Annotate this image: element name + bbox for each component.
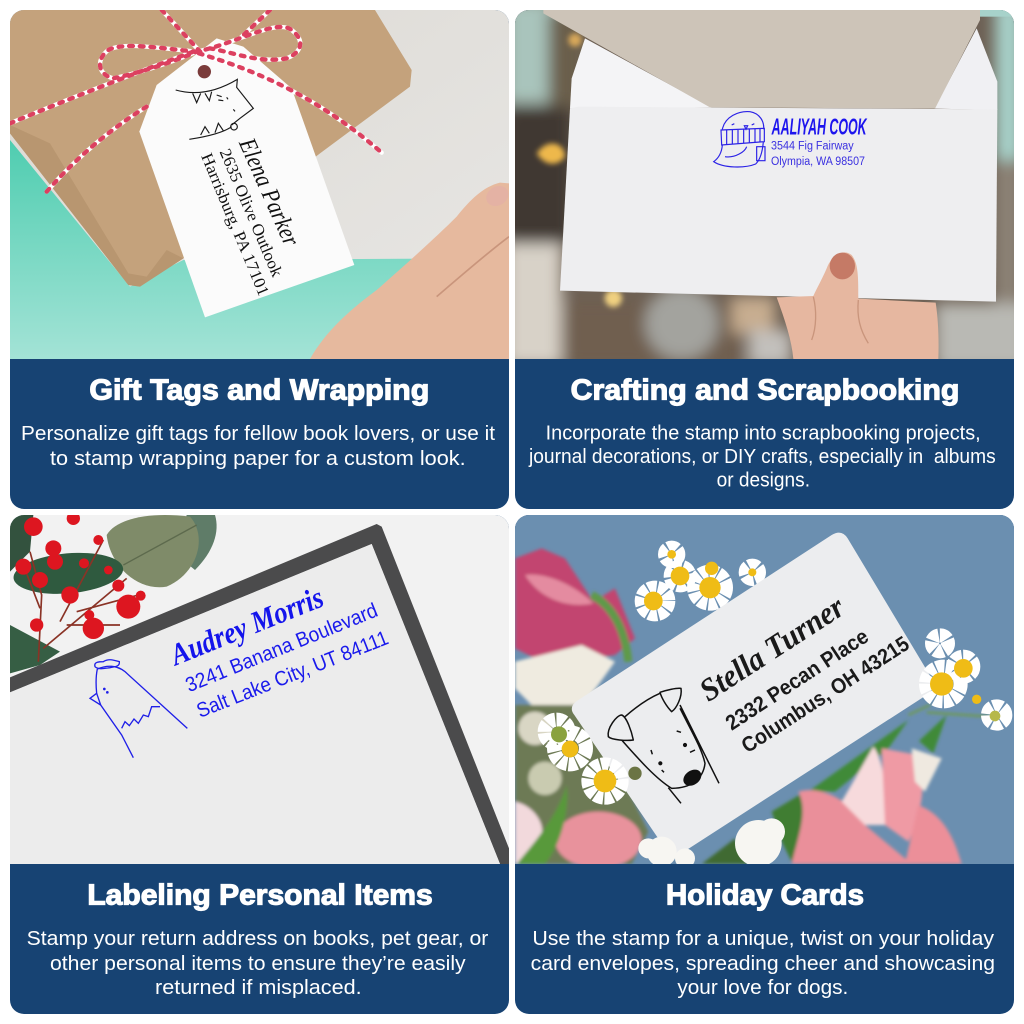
body text xyxy=(27,928,489,999)
body text: Personalize gift tags for fellow book lovers, or use it xyxy=(21,423,495,445)
panel: crafting and scrapbooking xyxy=(515,10,1014,509)
photo: stamped book page: Salt Lake City, UT 84111 xyxy=(193,626,392,723)
photo: envelope with stamped address xyxy=(515,10,1014,359)
body text xyxy=(528,422,996,492)
body text xyxy=(21,423,495,470)
photo: envelope with stamped address: Olympia, WA 98507 xyxy=(771,154,865,168)
body text: Incorporate the stamp into scrapbooking projects, xyxy=(546,422,981,444)
caption: labeling xyxy=(27,880,489,999)
photo: stamped book page: 3241 Banana Boulevard xyxy=(182,599,381,697)
photo: envelope with stamped address: 3544 Fig Fairway xyxy=(771,138,854,152)
photo: stamped book page: Audrey Morris xyxy=(164,580,328,673)
body text: returned if misplaced. xyxy=(155,977,362,999)
photo: gift tag on wrapped parcel xyxy=(10,10,509,359)
caption: holiday cards xyxy=(531,880,995,999)
caption: crafting xyxy=(528,375,996,492)
body text xyxy=(531,928,995,999)
daisies in front of the card xyxy=(545,635,1005,868)
photo: gift tag on wrapped parcel: Elena Parker xyxy=(233,133,305,250)
icon: cat stamp xyxy=(176,79,253,139)
photo: envelope with stamped address: AALIYAH COOK xyxy=(771,113,868,139)
body text: to stamp wrapping paper for a custom look. xyxy=(50,448,466,470)
photo: stamped card in flowers xyxy=(515,515,1014,864)
body text: your love for dogs. xyxy=(677,977,848,999)
photo: gift tag on wrapped parcel: Harrisburg, PA 17101 xyxy=(197,150,273,299)
photo: gift tag on wrapped parcel: 2635 Olive Outlook xyxy=(216,146,287,280)
panel: gift tags and wrapping xyxy=(10,10,509,509)
icon: dog stamp xyxy=(608,688,719,803)
heading: Gift Tags and Wrapping xyxy=(89,375,429,407)
flowers behind the card xyxy=(515,548,990,868)
heading: Crafting and Scrapbooking xyxy=(571,375,959,407)
panel: holiday cards xyxy=(515,515,1014,1014)
icon: penguin stamp xyxy=(714,112,765,167)
body text: other personal items to ensure they’re easily xyxy=(50,953,467,975)
icon: chicken stamp xyxy=(90,660,187,758)
photo: stamped card in flowers: Columbus, OH 43215 xyxy=(737,631,914,758)
photo: stamped card in flowers: Stella Turner xyxy=(693,588,851,708)
daisies behind the card xyxy=(642,548,759,614)
body text: or designs. xyxy=(717,470,810,492)
hand xyxy=(777,252,939,359)
caption: gift tags xyxy=(21,375,495,470)
photo: stamped book page xyxy=(10,515,509,864)
leaves and berries xyxy=(10,512,217,673)
photo: stamped card in flowers: 2332 Pecan Place xyxy=(721,624,873,735)
body text: journal decorations, or DIY crafts, especially in albums xyxy=(528,446,996,468)
body text: Use the stamp for a unique, twist on your holiday xyxy=(532,928,995,950)
card xyxy=(572,533,933,855)
hand xyxy=(310,183,509,359)
body text: card envelopes, spreading cheer and showcasing xyxy=(531,953,995,975)
body text: Stamp your return address on books, pet gear, or xyxy=(27,928,489,950)
heading: Holiday Cards xyxy=(666,880,864,912)
heading: Labeling Personal Items xyxy=(87,880,433,912)
panel: labeling personal items xyxy=(10,515,509,1014)
